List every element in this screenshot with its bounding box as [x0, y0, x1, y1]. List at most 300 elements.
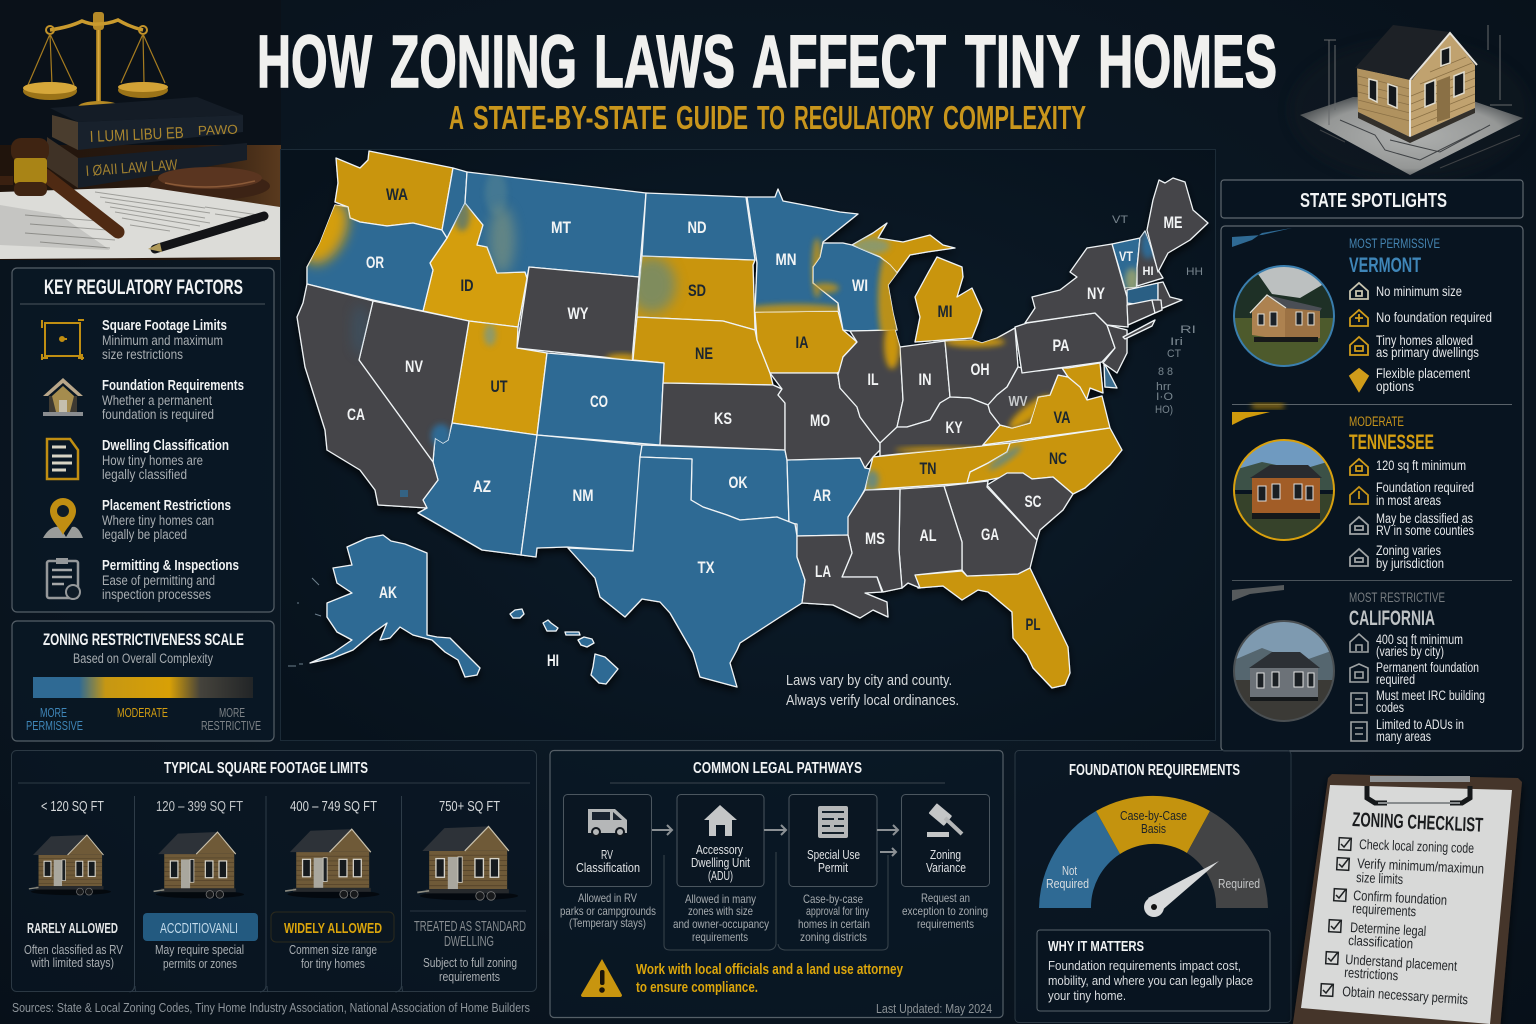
icon: permit form	[818, 806, 848, 838]
state labels: IL	[868, 370, 878, 389]
card: zoning variance: Zoning	[930, 847, 961, 862]
column: 120 to 399 sq ft	[143, 799, 258, 971]
state: eastern Massachusetts	[1158, 282, 1182, 308]
section: California: MOST RESTRICTIVE	[1349, 590, 1445, 605]
factor: foundation requirements: foundation is required	[102, 407, 214, 422]
pathway descriptions: exception to zoning	[902, 904, 988, 918]
badge: additionally	[143, 913, 258, 941]
state labels: MS	[865, 529, 885, 548]
section: Tennessee: MODERATE	[1349, 414, 1404, 429]
section: California: CALIFORNIA	[1349, 607, 1435, 630]
card: zoning variance	[902, 794, 990, 886]
section: Vermont: No minimum size	[1376, 284, 1462, 299]
pathway descriptions: approval for tiny	[806, 904, 869, 918]
section: Tennessee	[1232, 404, 1474, 571]
scale subtitle: Based on Overall Complexity	[73, 651, 213, 666]
state: Washington	[335, 151, 453, 230]
factor: foundation requirements: Foundation Requirements	[102, 377, 244, 394]
panel: key regulatory factors	[12, 268, 274, 612]
section: California: many areas	[1376, 729, 1431, 744]
card: ADU	[677, 794, 764, 886]
state labels: MI	[938, 302, 952, 321]
icon: law books: I LUMI LIBU EB	[89, 125, 184, 146]
state: Kentucky	[880, 397, 1000, 456]
column: 750 plus sq ft: DWELLING	[444, 934, 494, 950]
badge: widely allowed	[271, 912, 394, 942]
heading: pathways: COMMON LEGAL PATHWAYS	[693, 760, 862, 777]
photo: Tennessee tiny home	[1234, 440, 1334, 542]
column: under 120 sq ft: < 120 SQ FT	[41, 799, 104, 815]
state labels: KS	[714, 409, 732, 428]
state: Massachusetts	[1127, 283, 1158, 307]
column: 400 to 749 sq ft: for tiny homes	[301, 957, 365, 971]
pathway descriptions: Case-by-case	[803, 892, 863, 906]
icon: law books	[47, 97, 247, 188]
checklist items: Check local zoning code	[1359, 836, 1475, 856]
icon: house	[704, 805, 737, 836]
gauge needle	[1144, 861, 1219, 917]
icon: document	[47, 439, 78, 479]
subtitle: A	[449, 99, 464, 136]
card: special use permit: Permit	[818, 860, 848, 875]
callout: work with officials: to ensure compliance.	[636, 980, 758, 996]
state: Texas	[568, 457, 805, 687]
state: Utah	[452, 321, 547, 435]
section: Tennessee: Zoning varies	[1376, 543, 1441, 558]
state labels: SD	[688, 281, 706, 300]
state labels: GA	[981, 525, 999, 544]
icon: warning triangle	[581, 959, 622, 997]
section: California	[1232, 585, 1485, 744]
column: under 120 sq ft: with limited stays)	[30, 956, 114, 970]
small northeast callout marks: RI	[1180, 324, 1196, 336]
metal clip	[1367, 776, 1470, 803]
checkboxes	[1321, 838, 1351, 996]
section: Vermont: MOST PERMISSIVE	[1349, 236, 1440, 251]
state: Pennsylvania	[1015, 313, 1115, 373]
section: California: Must meet IRC building	[1376, 688, 1485, 703]
state: California	[297, 284, 438, 508]
house medium	[154, 832, 244, 898]
sources line: Sources: State & Local Zoning Codes, Tiny Home Industry Association, National Association of Home Builders	[12, 1000, 530, 1015]
state: Oregon	[307, 205, 447, 311]
heading: foundation: FOUNDATION REQUIREMENTS	[1069, 762, 1240, 779]
icon: clipboard permit	[47, 558, 80, 599]
scale labels: MORE	[40, 705, 67, 720]
panel: common legal pathways	[550, 750, 1003, 1018]
state: Georgia	[944, 481, 1037, 576]
state labels: NY	[1087, 284, 1105, 303]
state: Tennessee	[865, 443, 1010, 490]
state: Missouri	[770, 373, 880, 468]
section: Vermont: options	[1376, 379, 1414, 394]
arrow	[652, 825, 672, 835]
gauge chart: Case-by-Case	[1120, 808, 1187, 823]
house largest	[417, 826, 518, 900]
state labels: MN	[776, 250, 796, 269]
state: Indiana	[897, 341, 950, 427]
factor: permitting and inspections: Ease of permitting and	[102, 573, 215, 588]
icon: legal papers	[0, 187, 280, 259]
column: 400 to 749 sq ft	[271, 799, 394, 971]
small northeast callout marks: CT	[1167, 348, 1181, 360]
checklist items: Determine legal	[1350, 919, 1427, 939]
state labels: WI	[852, 276, 868, 295]
state: Illinois	[838, 330, 903, 443]
heading: square footage: TYPICAL SQUARE FOOTAGE LIMITS	[164, 760, 368, 777]
card: RV classification: RV	[601, 847, 613, 862]
state labels: OR	[366, 253, 384, 272]
map note: Laws vary by city and county.	[786, 672, 952, 689]
state labels: PL	[1026, 615, 1040, 634]
column: 750 plus sq ft: Subject to full zoning	[423, 956, 517, 970]
state: Florida	[915, 568, 1070, 688]
state labels: CO	[590, 392, 608, 411]
section: California: 400 sq ft minimum	[1376, 632, 1463, 647]
state: Michigan upper peninsula	[852, 223, 955, 273]
state: Louisiana	[797, 535, 888, 618]
house small	[29, 835, 111, 895]
section: Tennessee: 120 sq ft minimum	[1376, 458, 1466, 473]
column: 750 plus sq ft	[410, 799, 526, 984]
map note	[786, 672, 959, 709]
state: Hawaii islands	[510, 609, 618, 684]
column: 120 to 399 sq ft: ACCDITIOVANLI	[160, 921, 238, 937]
factor: placement restrictions	[102, 497, 231, 542]
state labels: NC	[1049, 449, 1067, 468]
state labels: NV	[405, 357, 423, 376]
panel: typical square footage limits	[12, 750, 536, 992]
state: Idaho	[423, 203, 527, 327]
arrows	[877, 825, 898, 856]
icon: gavel	[927, 803, 962, 837]
state: New Mexico	[521, 435, 642, 557]
small northeast callout marks	[1112, 214, 1203, 416]
factor: permitting and inspections: Permitting & Inspections	[102, 557, 239, 574]
pathway descriptions: requirements	[917, 917, 974, 931]
heading: scale: ZONING RESTRICTIVENESS SCALE	[43, 630, 244, 649]
state: Wisconsin	[813, 243, 897, 331]
icon: gavel	[0, 138, 118, 232]
house large	[285, 829, 380, 898]
pathway descriptions: requirements	[692, 930, 748, 944]
state labels: MT	[551, 218, 572, 237]
gauge chart: Basis	[1141, 821, 1166, 836]
pathway descriptions: (Temperary stays)	[569, 916, 646, 930]
factor: square footage limits: Minimum and maximum	[102, 333, 223, 348]
column: 120 to 399 sq ft: May require special	[155, 943, 244, 957]
small northeast callout marks: HO)	[1155, 404, 1173, 416]
column: 400 to 749 sq ft: Commen size range	[289, 943, 377, 957]
card: ADU: (ADU)	[708, 868, 733, 883]
small northeast callout marks: Iri	[1170, 336, 1183, 348]
scale labels: PERMISSIVE	[26, 718, 83, 733]
clipboard: zoning checklist	[1292, 774, 1522, 1024]
callout: why it matters: WHY IT MATTERS	[1048, 939, 1144, 955]
state labels: OH	[970, 360, 990, 379]
state: Long Island	[1123, 320, 1155, 339]
state labels: VA	[1054, 408, 1070, 427]
state: Mississippi	[842, 489, 902, 592]
Alaska offshore islands	[288, 578, 321, 666]
state: Virginia	[982, 375, 1110, 445]
icon: square footage	[42, 320, 84, 360]
panel: zoning restrictiveness scale	[12, 621, 274, 741]
state: Arkansas	[787, 458, 870, 536]
callout: why it matters: Foundation requirements impact cost,	[1048, 958, 1241, 973]
factor: placement restrictions: legally be placed	[102, 527, 187, 542]
pathway descriptions: parks or campgrounds	[560, 904, 656, 918]
factor: dwelling classification: legally classified	[102, 467, 187, 482]
subtitle	[449, 99, 1086, 136]
scale labels: MORE	[219, 705, 245, 720]
state: Delaware	[1104, 363, 1117, 388]
state: Kansas	[660, 383, 785, 450]
state: Rhode Island	[1152, 300, 1162, 313]
column: 750 plus sq ft: requirements	[439, 970, 500, 984]
illustration: law scales, books, gavel	[0, 0, 281, 260]
card: RV classification	[564, 794, 652, 886]
section: California: Limited to ADUs in	[1376, 717, 1464, 732]
icon: foundation house	[43, 378, 83, 416]
pathway descriptions: and owner-occupancy	[673, 917, 769, 931]
state: Vermont	[1112, 238, 1140, 288]
checklist items	[1321, 836, 1484, 1007]
section: Tennessee: by jurisdiction	[1376, 556, 1444, 571]
state: Nevada	[359, 301, 469, 462]
column: under 120 sq ft	[24, 799, 124, 970]
panel: state spotlights	[1221, 226, 1523, 751]
factor: foundation requirements: Whether a permanent	[102, 393, 212, 408]
pathway descriptions: zoning districts	[800, 930, 867, 944]
section: Vermont: Flexible placement	[1376, 366, 1470, 381]
column: 120 to 399 sq ft: 120 – 399 SQ FT	[156, 799, 243, 815]
state labels: IN	[918, 370, 932, 389]
factor: permitting and inspections	[102, 557, 239, 602]
state: Nebraska	[633, 317, 773, 385]
state: Alabama	[899, 486, 962, 588]
card: zoning variance: Variance	[926, 860, 966, 875]
state labels: IA	[796, 333, 808, 352]
book spine lettering: I ØAII LAW LAW	[85, 157, 179, 180]
state: Maryland	[1062, 363, 1103, 405]
small northeast callout marks: HH	[1186, 266, 1203, 278]
factor: dwelling classification: Dwelling Classification	[102, 437, 229, 454]
title: HOMES	[1098, 20, 1277, 103]
dimension posts	[1324, 25, 1512, 125]
state: West Virginia	[988, 367, 1068, 428]
state labels: ID	[460, 276, 474, 295]
icon: sound block	[150, 167, 270, 200]
state labels: CA	[347, 405, 365, 424]
state labels: WA	[386, 185, 408, 204]
section: Vermont	[1232, 228, 1492, 394]
paper	[1301, 785, 1512, 1024]
checklist items: requirements	[1352, 900, 1417, 919]
subtitle: GUIDE	[676, 99, 748, 136]
column: 400 to 749 sq ft: WIDELY ALLOWED	[284, 921, 382, 937]
pathway descriptions: Request an	[921, 891, 970, 905]
title: AFFECT	[752, 20, 946, 103]
state labels: NM	[572, 486, 594, 505]
title: HOW	[257, 20, 372, 103]
section: Vermont: as primary dwellings	[1376, 345, 1479, 360]
spotlight icons	[1350, 634, 1368, 741]
section: California: Permanent foundation	[1376, 660, 1479, 675]
state labels: SC	[1024, 492, 1042, 511]
state labels: HI	[547, 651, 559, 670]
state labels: AK	[379, 583, 398, 602]
factor: square footage limits	[102, 317, 227, 362]
state: Ohio	[945, 328, 1018, 405]
factor: dwelling classification	[102, 437, 229, 482]
state labels: TN	[920, 459, 936, 478]
section: California: (varies by city)	[1376, 644, 1444, 659]
subtitle: COMPLEXITY	[943, 99, 1086, 136]
pathway descriptions: Allowed in RV	[578, 891, 637, 905]
subtitle: TO	[757, 99, 785, 136]
last updated: Last Updated: May 2024	[876, 1001, 992, 1016]
gauge chart: Not	[1062, 863, 1077, 878]
scale labels	[26, 705, 261, 733]
state labels: AR	[813, 486, 831, 505]
card: ADU: Dwelling Unit	[691, 855, 750, 870]
checklist items: Obtain necessary permits	[1342, 983, 1469, 1007]
callout: work with officials	[636, 962, 903, 996]
card: RV classification: Classification	[576, 860, 640, 875]
section: Vermont: Tiny homes allowed	[1376, 333, 1473, 348]
section: California: codes	[1376, 700, 1404, 715]
pathway descriptions: zones with size	[688, 904, 753, 918]
state: South Carolina	[987, 473, 1073, 540]
state labels: KY	[946, 418, 963, 437]
state labels: ND	[688, 218, 706, 237]
pathway descriptions	[560, 891, 988, 944]
state labels: LA	[815, 562, 831, 581]
factor: dwelling classification: How tiny homes are	[102, 453, 203, 468]
factor: permitting and inspections: inspection processes	[102, 587, 211, 602]
callout: why it matters: mobility, and where you can legally place	[1048, 973, 1253, 988]
callout: why it matters	[1037, 930, 1270, 1011]
state labels: TX	[698, 558, 715, 577]
factor: placement restrictions: Where tiny homes can	[102, 513, 214, 528]
state: New York	[1025, 244, 1128, 327]
gauge chart: Required	[1218, 876, 1260, 891]
heading: key regulatory factors: KEY REGULATORY FACTORS	[44, 276, 243, 299]
section: Tennessee: in most areas	[1376, 493, 1441, 508]
factor: foundation requirements	[102, 377, 244, 422]
photo: California tiny home	[1234, 621, 1334, 722]
checklist items: classification	[1348, 932, 1414, 951]
state: Connecticut	[1127, 300, 1155, 325]
column: 750 plus sq ft: 750+ SQ FT	[439, 799, 500, 815]
state: North Dakota	[642, 193, 755, 260]
state: North Carolina	[967, 428, 1122, 494]
illustration: house on blueprint	[1290, 25, 1530, 180]
small northeast callout marks: I·O	[1156, 391, 1173, 403]
blueprint sheet	[1300, 97, 1523, 175]
section: California: required	[1376, 672, 1415, 687]
map note: Always verify local ordinances.	[786, 692, 959, 709]
section: Tennessee: RV in some counties	[1376, 523, 1474, 538]
subtitle: REGULATORY	[794, 99, 934, 136]
state: Minnesota	[747, 189, 858, 312]
heading box: state spotlights: STATE SPOTLIGHTS	[1300, 190, 1447, 212]
column: 750 plus sq ft: TREATED AS STANDARD	[414, 919, 526, 935]
state labels: UT	[490, 377, 508, 396]
callout: why it matters: your tiny home.	[1048, 988, 1126, 1003]
state labels: OK	[728, 473, 748, 492]
column: 120 to 399 sq ft: permits or zones	[163, 957, 237, 971]
state labels	[347, 185, 1182, 670]
state: Michigan lower peninsula	[915, 257, 982, 342]
section: Tennessee: TENNESSEE	[1349, 431, 1434, 454]
spotlight icons	[1350, 283, 1368, 391]
title: TINY	[965, 20, 1080, 103]
callout: work with officials: Work with local officials and a land use attorney	[636, 962, 903, 978]
card: special use permit	[789, 794, 877, 886]
state: Alaska	[310, 535, 480, 677]
photo: Vermont tiny home	[1234, 266, 1334, 366]
scale labels: MODERATE	[117, 705, 168, 720]
choropleth map of states	[297, 151, 1208, 688]
state: Wyoming	[517, 267, 639, 360]
icon: van	[588, 809, 627, 836]
card: ADU: Accessory	[696, 842, 743, 857]
state: Montana	[465, 172, 646, 278]
checklist items: Verify minimum/maximun	[1357, 855, 1484, 877]
spotlight icons	[1350, 459, 1368, 566]
gradient scale bar	[33, 677, 253, 698]
panel: US map	[280, 150, 1216, 740]
checklist items: size limits	[1356, 869, 1404, 887]
state labels: AL	[920, 526, 936, 545]
pathway descriptions: Allowed in many	[685, 892, 756, 906]
state labels: HI	[1142, 264, 1154, 278]
column: 400 to 749 sq ft: 400 – 749 SQ FT	[290, 799, 377, 815]
state: South Dakota	[637, 256, 755, 330]
arrow	[764, 825, 786, 835]
factor: square footage limits: size restrictions	[102, 347, 183, 362]
house walls and roof	[1355, 25, 1477, 143]
state: Maine	[1147, 178, 1208, 272]
title: LAWS	[594, 20, 735, 103]
section: Vermont: VERMONT	[1349, 254, 1421, 277]
section: Tennessee: Foundation required	[1376, 480, 1474, 495]
card: special use permit: Special Use	[807, 847, 860, 862]
title: ZONING	[390, 20, 577, 103]
factor: placement restrictions: Placement Restrictions	[102, 497, 231, 514]
icon: law books: PAWO	[198, 122, 238, 138]
state labels: MO	[810, 411, 830, 430]
checklist items: Confirm foundation	[1353, 887, 1448, 908]
checklist items: Understand placement	[1345, 951, 1458, 974]
state: Colorado	[537, 353, 664, 445]
state: Iowa	[755, 311, 857, 373]
column: under 120 sq ft: Often classified as RV	[24, 943, 124, 957]
state labels: ME	[1164, 213, 1182, 232]
small northeast callout marks: hrr	[1156, 381, 1171, 393]
icon: pen	[148, 216, 264, 252]
factor: square footage limits: Square Footage Limits	[102, 317, 227, 334]
panel: foundation requirements	[1015, 750, 1291, 1022]
state labels: VT	[1119, 248, 1133, 264]
heading box: state spotlights	[1221, 180, 1523, 218]
pathway descriptions: homes in certain	[798, 917, 870, 931]
soft colour bleeds on map	[293, 171, 1155, 497]
section: Vermont: No foundation required	[1376, 310, 1492, 325]
icon: map pin	[43, 498, 83, 538]
